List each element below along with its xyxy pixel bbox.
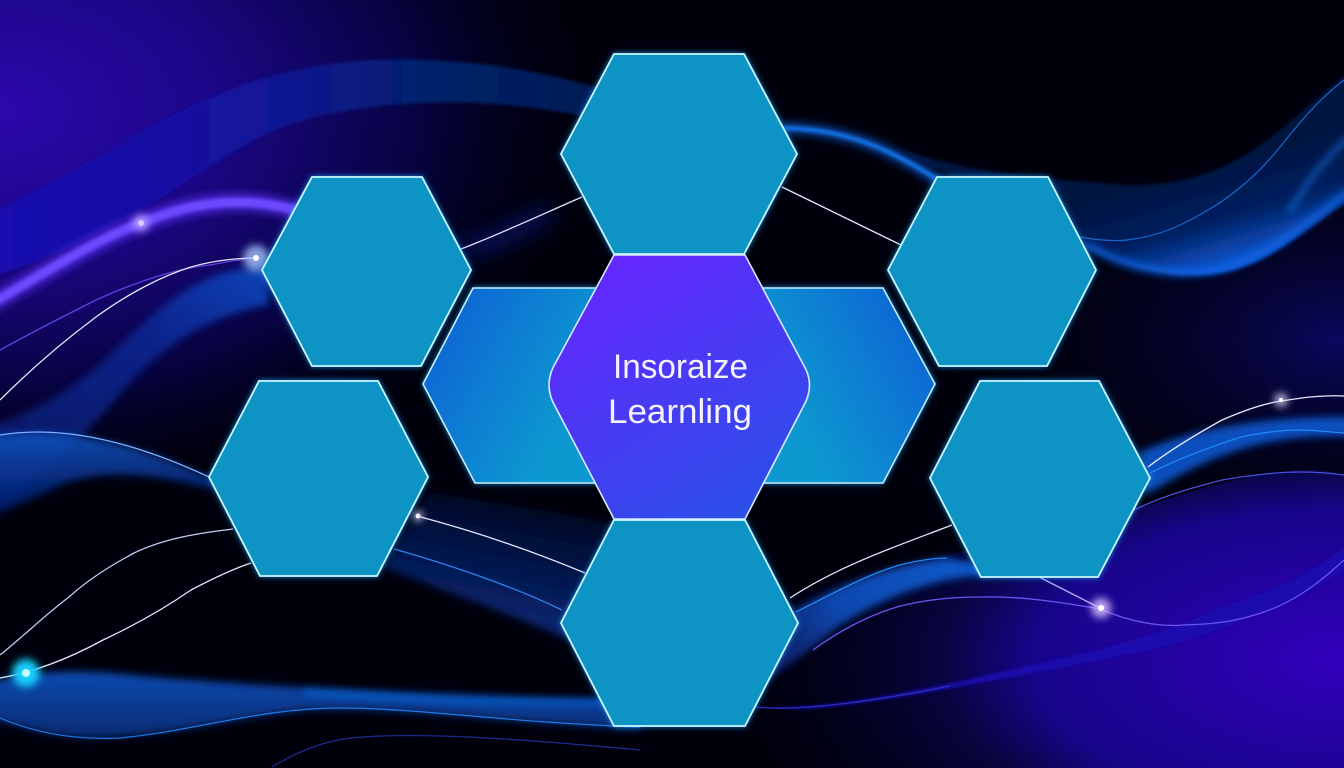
hexagon group (209, 54, 1150, 726)
glowing nodes (12, 215, 1288, 687)
left mid ribbon (0, 433, 215, 520)
lower-left ribbon under white node (0, 267, 268, 520)
right upper ribbon (1140, 417, 1344, 495)
center title line 2: Learnling (608, 393, 752, 431)
left wing hexagon (423, 288, 600, 483)
hexagon: upper left (262, 177, 471, 366)
hexagon: top (561, 54, 797, 254)
top-right ribbon (900, 60, 1344, 275)
bottom-left ribbon (0, 672, 640, 738)
hexagon: bottom (561, 520, 798, 726)
thin connector lines (0, 187, 1344, 708)
purple band (0, 202, 295, 310)
hexagon: lower right (930, 381, 1150, 577)
upper-left wide ribbon (0, 59, 640, 280)
hexagon: lower left (209, 381, 428, 576)
glow beside upper-left hexagon (470, 215, 545, 248)
lower-right ribbon (765, 558, 985, 682)
centre-left diagonal ribbon (383, 493, 640, 650)
center title line 1: Insoraize (613, 348, 748, 386)
purple ribbon (755, 530, 1344, 709)
center hexagon (549, 255, 810, 519)
hexagon: upper right (888, 177, 1096, 366)
right wing hexagon (760, 288, 935, 483)
